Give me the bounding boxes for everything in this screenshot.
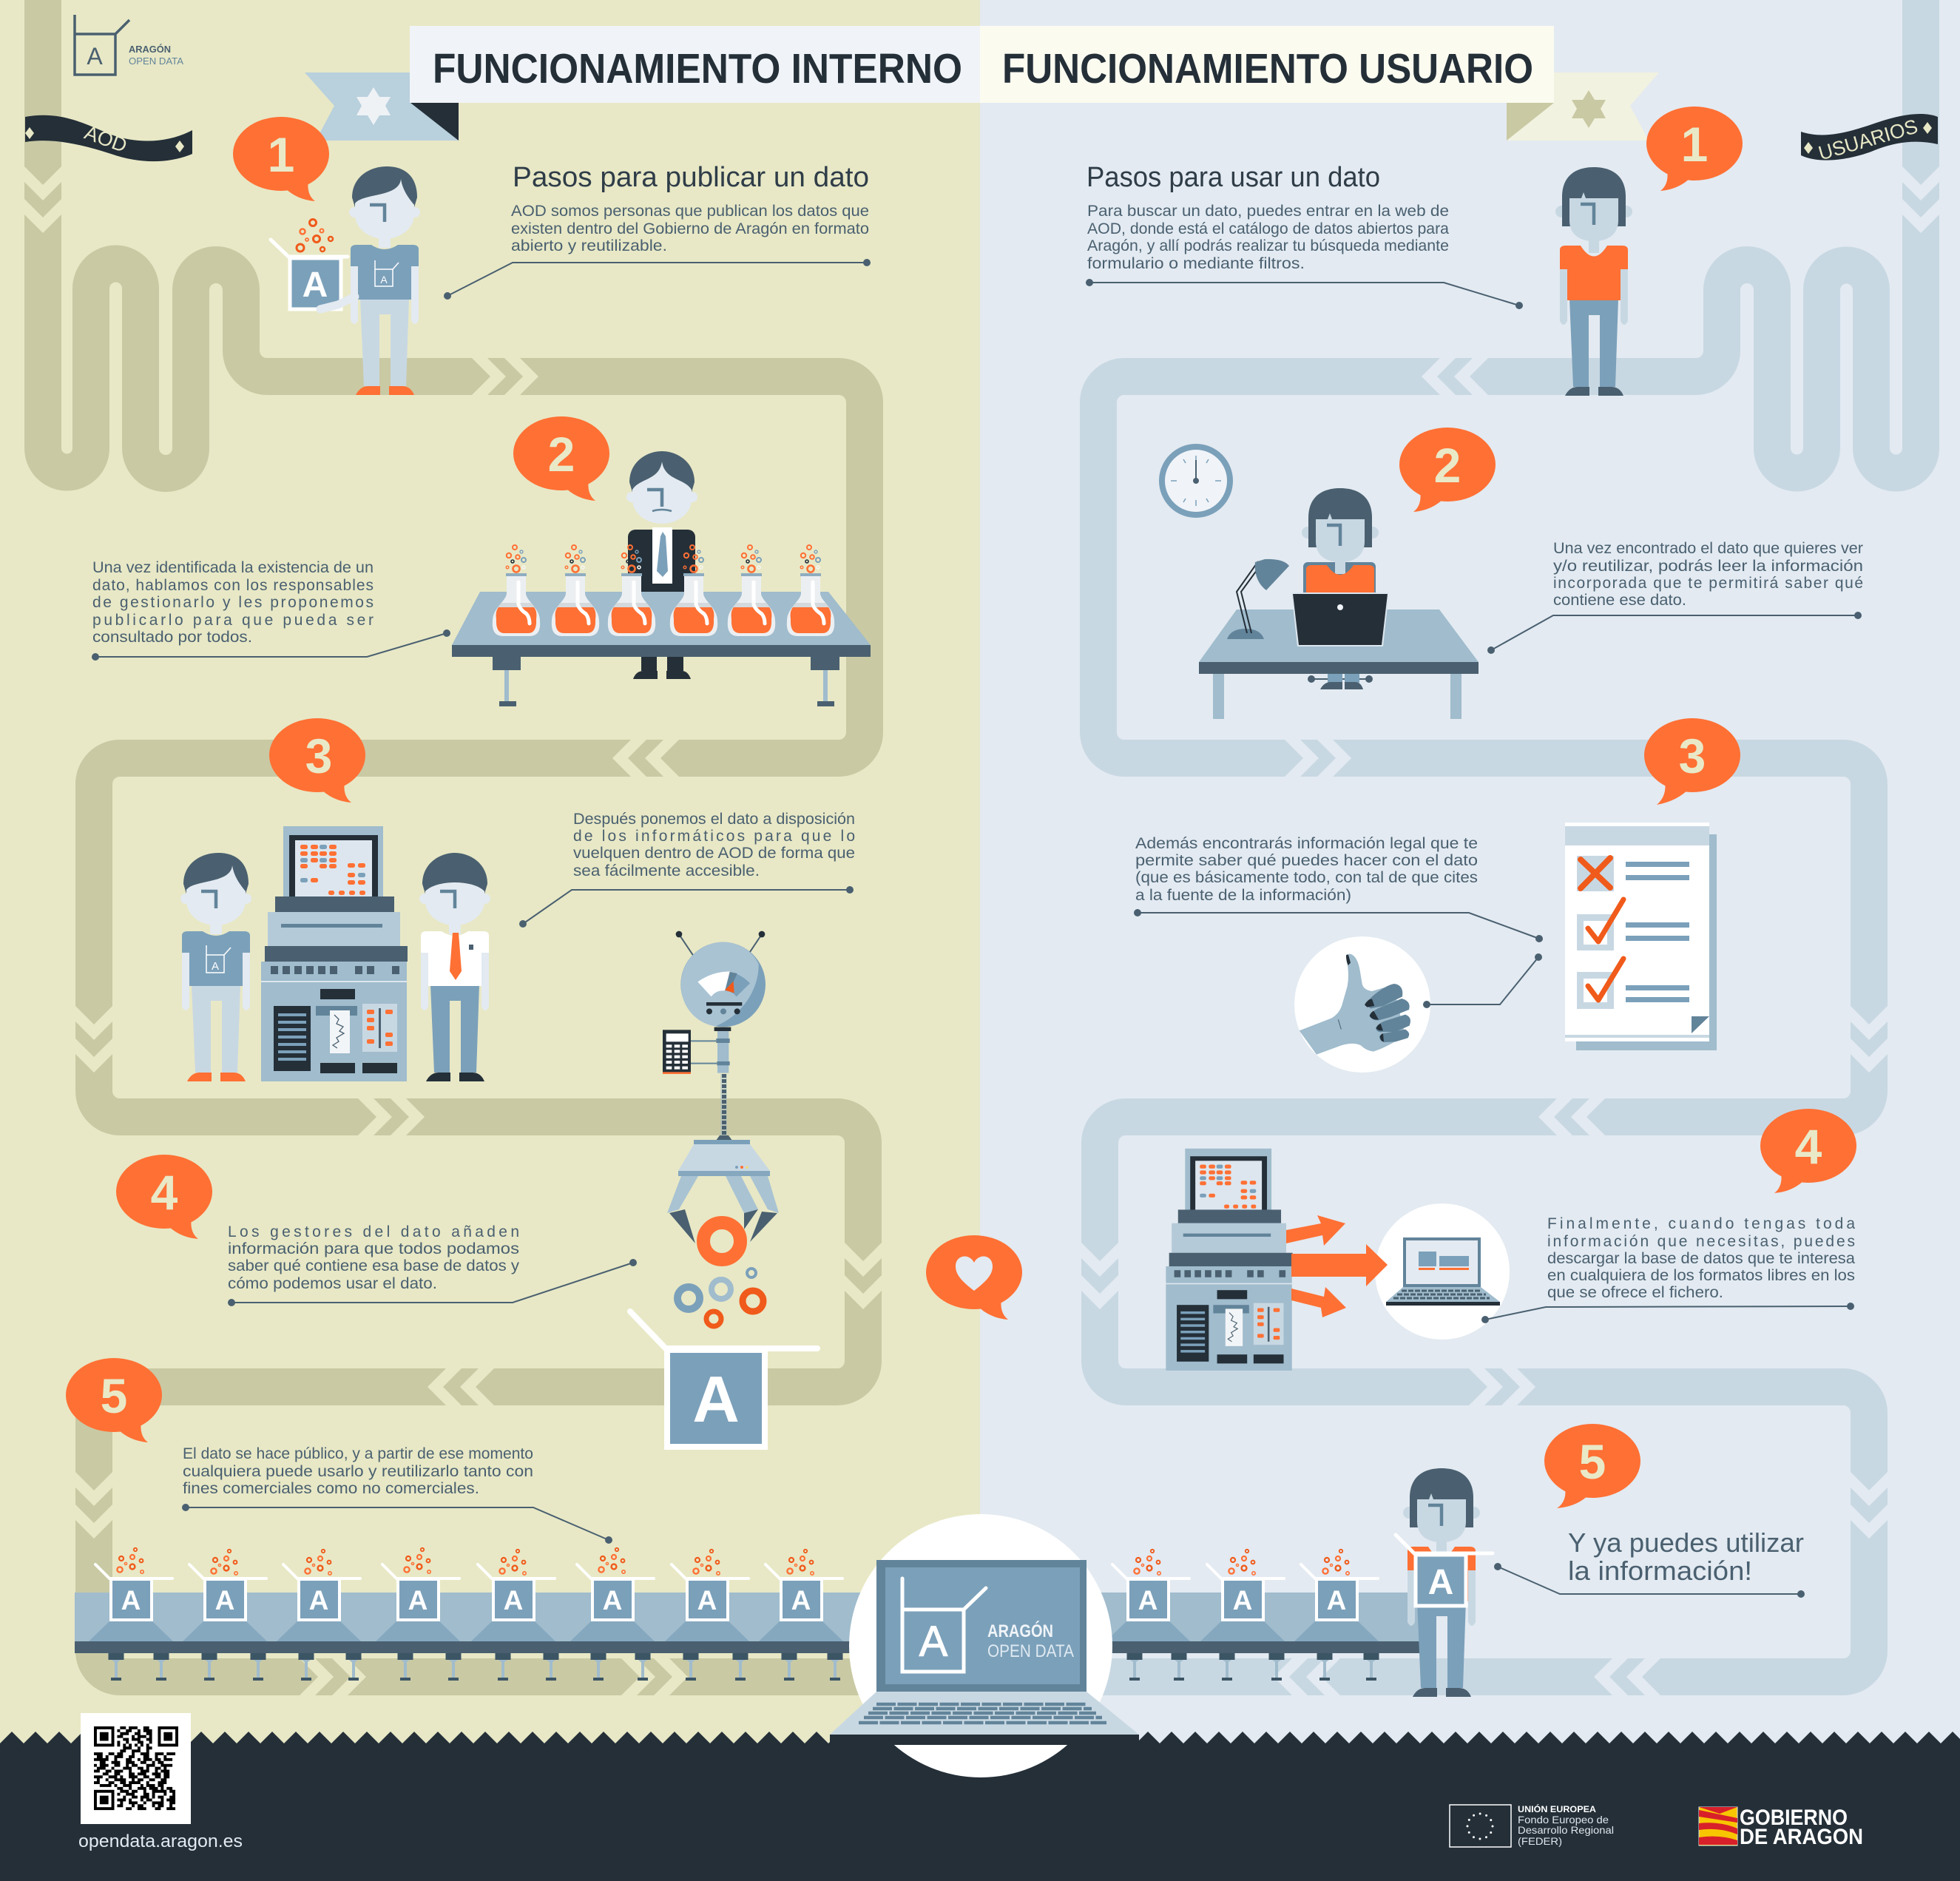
box 1 on belt <box>95 1548 172 1620</box>
box 7 on belt <box>672 1550 748 1620</box>
illustration: user at desk with laptop and lamp <box>1199 488 1479 719</box>
text block: AOD step 4: saber qué contiene esa base de datos y <box>228 1257 520 1274</box>
title: funcionamiento interno <box>410 26 980 103</box>
box 2 on right belt: A <box>1233 1585 1252 1615</box>
website URL: opendata.aragon.es <box>78 1831 243 1851</box>
text block: AOD step 4: Los gestores del dato añaden <box>228 1223 519 1240</box>
text block: user step 4: Finalmente, cuando tengas toda <box>1547 1215 1855 1232</box>
speech bubble: 1 left <box>233 117 329 201</box>
text block: user step 4 <box>1547 1215 1855 1301</box>
leader line: user step 1 <box>1086 279 1523 309</box>
icon: wall clock <box>1162 447 1230 515</box>
footer band <box>0 1732 1960 1881</box>
text block: user step 4: en cualquiera de los formatos libres en los <box>1547 1267 1855 1284</box>
conveyor belt: left <box>75 1593 888 1681</box>
arrows: AOD path direction chevrons <box>24 166 882 1695</box>
person: AOD worker holding box: A <box>380 274 388 286</box>
text block: AOD step 5: El dato se hace público, y a partir de ese momento <box>183 1445 533 1462</box>
banner: USUARIOS: USUARIOS <box>1816 115 1920 164</box>
speech bubble: 1 left: 1 <box>268 127 294 182</box>
icon: falling data rings <box>677 1269 763 1326</box>
banner: AOD: AOD <box>81 121 130 157</box>
arrows: download to laptop <box>1286 1215 1388 1317</box>
speech bubble: 4 right <box>1760 1109 1856 1193</box>
logo: Unión Europea FEDER <box>1450 1803 1614 1847</box>
document: checklist <box>1565 823 1717 1050</box>
background: right panel <box>980 0 1960 1881</box>
speech bubble: 3 right: 3 <box>1679 729 1706 783</box>
text block: user step 2: y/o reutilizar, podrás leer la información <box>1553 558 1863 575</box>
leader line: user step 2 <box>1487 612 1862 654</box>
text block: AOD step 2: dato, hablamos con los responsables <box>92 577 374 594</box>
illustration: man behind table with flasks <box>452 451 871 706</box>
text block: AOD step 2: publicarlo para que pueda ser <box>92 612 374 629</box>
icon: open data box with bubbles <box>271 219 348 309</box>
leader line: AOD step 5 <box>182 1504 612 1544</box>
speech bubble: 1 right: 1 <box>1681 117 1708 172</box>
text block: user step 1: Aragón, y allí podrás realizar tu búsqueda mediante <box>1087 237 1449 254</box>
text block: AOD step 2: Una vez identificada la existencia de un <box>92 559 374 576</box>
text block: AOD step 5: fines comerciales como no comerciales. <box>183 1480 479 1497</box>
central laptop: Aragón Open Data: OPEN DATA <box>987 1641 1074 1661</box>
speech bubble: 5 left: 5 <box>101 1368 127 1423</box>
leader line: user step 5 <box>1494 1563 1805 1598</box>
background: left panel <box>0 0 980 1881</box>
leader line: thumb <box>1423 953 1542 1008</box>
text block: user step 5 <box>1568 1527 1804 1586</box>
box 2 on right belt <box>1207 1550 1284 1620</box>
box 8 on belt: A <box>791 1585 811 1615</box>
text block: AOD step 1: existen dentro del Gobierno de Aragón en formato <box>511 220 869 237</box>
text block: AOD step 2: de gestionarlo y les proponemos <box>92 594 374 611</box>
person: user holding box: A <box>1428 1563 1453 1602</box>
flag: right ribbon with star <box>1507 72 1659 141</box>
speech bubble: 4 right: 4 <box>1795 1119 1822 1174</box>
icon: large open data box: A <box>692 1362 740 1436</box>
box 2 on belt: A <box>215 1585 234 1615</box>
icon: open data box with bubbles: A <box>303 266 328 305</box>
illustration: two technicians and computer: A <box>212 960 219 973</box>
logo: Unión Europea FEDER: Fondo Europeo de <box>1518 1814 1609 1826</box>
text block: user step 3: a la fuente de la información) <box>1135 887 1351 904</box>
banner: AOD <box>25 115 192 161</box>
speech bubble: 3 left: 3 <box>305 729 332 783</box>
box 3 on right belt: A <box>1327 1585 1346 1615</box>
leader line: user step 4 <box>1481 1303 1854 1323</box>
text block: user step 5: Y ya puedes utilizar <box>1568 1527 1804 1558</box>
text block: user step 2: Una vez encontrado el dato que quieres ver <box>1553 540 1863 557</box>
speech bubble: 5 left <box>66 1358 162 1442</box>
box 4 on belt <box>382 1548 459 1620</box>
section heading: publicar: Pasos para publicar un dato <box>513 162 869 193</box>
speech bubble: 2 left: 2 <box>548 427 575 482</box>
title: funcionamiento interno: FUNCIONAMIENTO INTERNO <box>433 45 962 92</box>
logo: Unión Europea FEDER: (FEDER) <box>1518 1835 1562 1847</box>
speech bubble: 5 right <box>1544 1424 1640 1508</box>
box 1 on belt: A <box>121 1585 141 1615</box>
title: funcionamiento usuario: FUNCIONAMIENTO USUARIO <box>1002 45 1533 92</box>
leader line: AOD step 2 <box>92 629 450 661</box>
winding path: usuarios <box>980 0 1921 1677</box>
text block: AOD step 2 <box>92 559 374 646</box>
logo: Aragón Open Data: ARAGÓN <box>129 44 171 55</box>
central laptop: Aragón Open Data: ARAGÓN <box>987 1621 1053 1641</box>
text block: user step 4: información que necesitas, puedes <box>1547 1233 1855 1250</box>
text block: AOD step 3: Después ponemos el dato a disposición <box>573 811 855 828</box>
text block: user step 1 <box>1087 203 1449 272</box>
text block: AOD step 4: información para que todos podamos <box>228 1240 519 1257</box>
logo: Aragón Open Data: OPEN DATA <box>129 55 183 67</box>
logo: Gobierno de Aragón <box>1699 1806 1863 1849</box>
box 1 on right belt: A <box>1138 1585 1158 1615</box>
QR code <box>81 1713 191 1824</box>
box 3 on right belt <box>1301 1550 1378 1620</box>
text block: user step 1: AOD, donde está el catálogo de datos abiertos para <box>1087 220 1449 237</box>
logo: Gobierno de Aragón: DE ARAGON <box>1740 1825 1863 1849</box>
speech bubble: 3 right <box>1644 718 1740 805</box>
text block: user step 1: formulario o mediante filtros. <box>1087 255 1305 272</box>
box 6 on belt: A <box>603 1585 622 1615</box>
text block: user step 3 <box>1135 835 1478 904</box>
box 7 on belt: A <box>697 1585 717 1615</box>
icon: large open data box <box>630 1311 817 1447</box>
illustration: computer <box>1166 1149 1293 1371</box>
illustration: robot arm with gauge and calculator <box>663 931 779 1260</box>
text block: user step 2: incorporada que te permitirá saber qué <box>1553 575 1863 592</box>
box 6 on belt <box>577 1548 654 1620</box>
speech bubble: 1 right <box>1646 107 1743 191</box>
person: AOD worker holding box <box>320 166 420 395</box>
central laptop: Aragón Open Data <box>830 1514 1139 1777</box>
flag: left ribbon with star <box>305 72 459 141</box>
text block: AOD step 2: consultado por todos. <box>92 629 252 646</box>
box 5 on belt <box>478 1550 555 1620</box>
speech bubble: 2 right: 2 <box>1434 438 1461 493</box>
title: funcionamiento usuario <box>980 26 1554 103</box>
illustration: two technicians and computer <box>180 826 490 1081</box>
text block: user step 3: (que es básicamente todo, con tal de que cites <box>1135 869 1478 886</box>
box 1 on right belt <box>1112 1550 1189 1620</box>
text block: user step 2 <box>1553 540 1863 609</box>
leader line: AOD step 1 <box>444 259 871 300</box>
text block: user step 2: contiene ese dato. <box>1553 592 1686 609</box>
text block: AOD step 1 <box>511 203 869 254</box>
text block: user step 5: la información! <box>1568 1556 1752 1586</box>
text block: AOD step 1: AOD somos personas que publican los datos que <box>511 203 869 220</box>
person: female user <box>1555 167 1632 396</box>
box 3 on belt <box>283 1550 360 1620</box>
speech bubble: 3 left <box>269 718 365 803</box>
text block: AOD step 3: de los informáticos para que lo <box>573 828 855 845</box>
box 8 on belt <box>766 1550 842 1620</box>
leader line: AOD step 4 <box>228 1259 637 1306</box>
box 2 on belt <box>189 1550 266 1620</box>
logo: Aragón Open Data: A <box>87 43 103 70</box>
section heading: usar: Pasos para usar un dato <box>1087 162 1380 193</box>
text block: user step 1: Para buscar un dato, puedes entrar en la web de <box>1087 203 1449 220</box>
text block: user step 3: Además encontrarás información legal que te <box>1135 835 1478 852</box>
speech bubble: 4 left: 4 <box>151 1165 178 1220</box>
speech bubble: 5 right: 5 <box>1579 1434 1606 1489</box>
logo: Gobierno de Aragón: GOBIERNO <box>1740 1806 1848 1830</box>
text block: AOD step 5 <box>183 1445 533 1497</box>
box 5 on belt: A <box>504 1585 523 1615</box>
box 4 on belt: A <box>408 1585 428 1615</box>
text block: user step 4: descargar la base de datos que te interesa <box>1547 1250 1855 1267</box>
speech bubble: 4 left <box>116 1155 212 1239</box>
speech bubble: 2 left <box>513 416 609 501</box>
logo: Aragón Open Data <box>75 15 183 75</box>
text block: AOD step 4 <box>228 1223 520 1292</box>
icon: laptop in circle <box>1375 1203 1510 1340</box>
text block: AOD step 5: cualquiera puede usarlo y reutilizarlo tanto con <box>183 1463 533 1480</box>
text block: user step 4: que se ofrece el fichero. <box>1547 1284 1723 1301</box>
leader line: user step 3 text <box>1134 909 1543 942</box>
icon: thumbs up <box>1294 936 1430 1073</box>
leader line: AOD step 3 <box>519 886 854 928</box>
logo: Unión Europea FEDER: Desarrollo Regional <box>1518 1824 1614 1836</box>
conveyor belt: right <box>1072 1593 1424 1681</box>
person: user holding box <box>1396 1468 1493 1697</box>
logo: Unión Europea FEDER: UNIÓN EUROPEA <box>1518 1803 1596 1814</box>
speech bubble: 2 right <box>1399 428 1496 512</box>
text block: AOD step 3 <box>573 811 855 879</box>
box 3 on belt: A <box>309 1585 328 1615</box>
text block: AOD step 4: cómo podemos usar el dato. <box>228 1275 437 1292</box>
text block: AOD step 3: sea fácilmente accesible. <box>573 862 760 879</box>
text block: AOD step 1: abierto y reutilizable. <box>511 237 667 254</box>
text block: AOD step 3: vuelquen dentro de AOD de forma que <box>573 845 855 862</box>
winding path: AOD <box>43 0 980 1677</box>
text block: user step 3: permite saber qué puedes hacer con el dato <box>1135 852 1478 869</box>
central laptop: Aragón Open Data: A <box>919 1618 948 1666</box>
speech bubble: heart <box>926 1235 1022 1320</box>
arrows: usuarios path direction chevrons <box>1081 166 1939 1695</box>
